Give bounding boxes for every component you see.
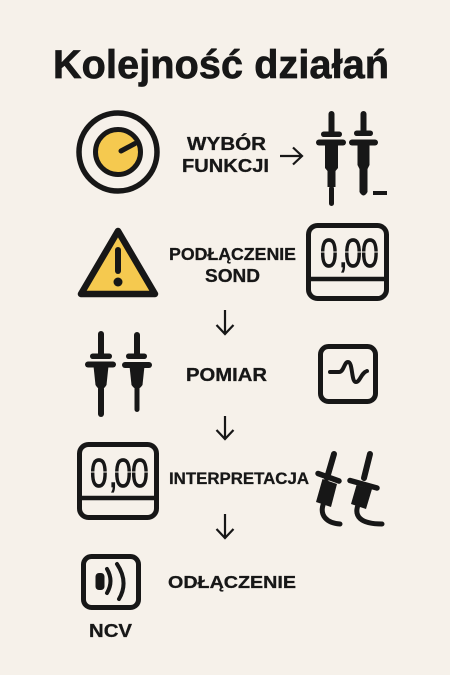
icon: signal waveform	[320, 346, 376, 402]
label: step 2: SOND	[205, 266, 260, 286]
label: step 2	[169, 244, 296, 286]
icon: selector knob	[79, 113, 157, 191]
label: step 3: POMIAR	[186, 365, 267, 385]
arrow: down 2	[216, 416, 234, 439]
label: step 1	[182, 133, 269, 176]
title: Kolejność działań	[53, 43, 389, 87]
label: step 5: ODŁĄCZENIE	[168, 572, 296, 592]
icon: test probes	[85, 331, 152, 417]
icon: multimeter display	[308, 226, 387, 298]
icon: test probes with minus	[316, 111, 387, 206]
icon: multimeter display: 0,00	[90, 450, 149, 496]
label: step 4: INTERPRETACJA	[169, 469, 309, 488]
label: step 1: FUNKCJI	[182, 156, 269, 176]
label: NCV: NCV	[89, 621, 132, 641]
arrow: down 1	[216, 310, 234, 334]
label: step 1: WYBÓR	[187, 133, 266, 154]
arrow: right	[280, 148, 302, 164]
icon: warning triangle	[81, 231, 155, 294]
icon: angled probes with cables	[316, 454, 382, 524]
label: step 2: PODŁĄCZENIE	[169, 244, 296, 264]
icon: NCV sensor	[84, 556, 138, 608]
arrow: down 3	[216, 514, 234, 538]
icon: multimeter display	[79, 444, 157, 518]
icon: multimeter display: 0,00	[320, 230, 379, 276]
